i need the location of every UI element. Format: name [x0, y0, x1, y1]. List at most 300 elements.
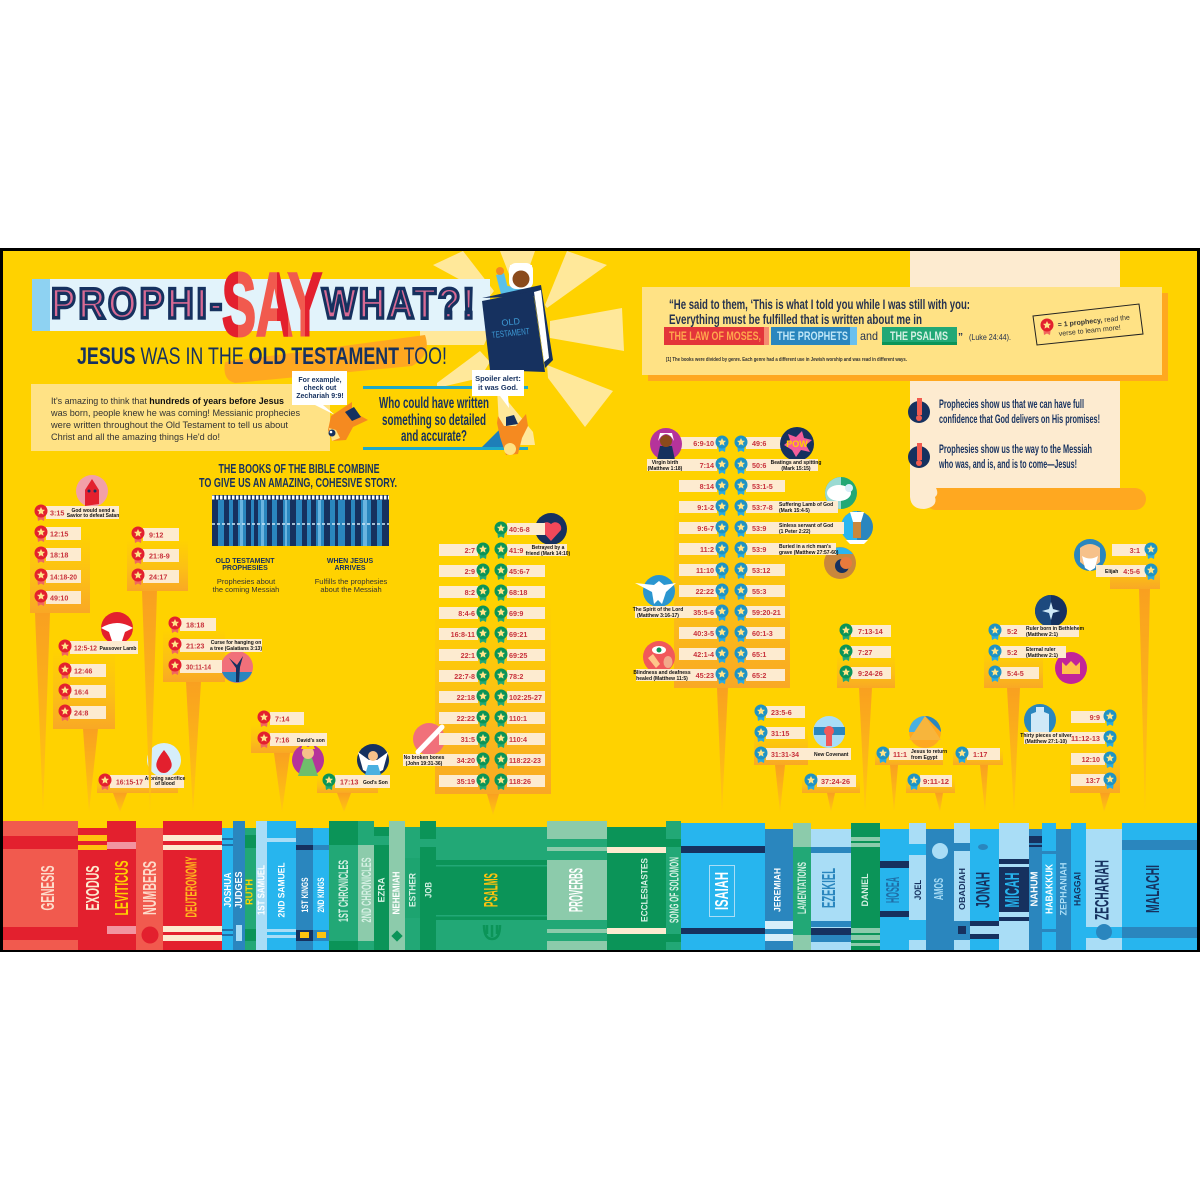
2 Samuel 7:16: 7:16: [275, 736, 289, 744]
icon: Old Testament book with figure: [482, 263, 553, 372]
Genesis 12:15: [34, 526, 81, 542]
book: 1st Chronicles: [329, 821, 358, 950]
Numbers 21:8-9: [132, 548, 179, 564]
caption: no broken bones: [403, 754, 446, 767]
caption: virgin birth: (Matthew 1:18): [648, 466, 683, 472]
caption: blindness and deafness: [633, 669, 691, 682]
Isaiah rows left: 9:1-2: [697, 503, 714, 512]
Psalm rows right: 118:22-23: [509, 756, 541, 765]
timeline: Zechariah prophecies: [1020, 704, 1120, 812]
Isaiah rows left: 8:14: [700, 482, 714, 491]
quote panel: and: [860, 329, 878, 343]
Psalm rows left: 35:19: [457, 777, 475, 786]
caption: rich man's grave: Buried in a rich man's: [779, 544, 831, 550]
book: Job: [420, 821, 436, 950]
Ezekiel 37:24-26: 37:24-26: [821, 777, 850, 786]
book: Joel: [909, 823, 926, 950]
book: Ecclesiastes: [607, 827, 666, 950]
Psalm rows right: 78:2: [509, 672, 523, 681]
icon: star of Bethlehem: [1035, 595, 1067, 627]
quote panel: Everything must be fulfilled that is written about me in: [669, 312, 922, 327]
Micah 5:2 ruler: [988, 624, 1085, 640]
Daniel 7:13-14: 7:13-14: [858, 627, 883, 636]
Isaiah rows left: 45:23: [696, 671, 714, 680]
title: Prophi-Say What?!: [32, 254, 490, 354]
book: Jonah: JONAH: [974, 872, 994, 908]
timeline: Malachi prophecies: [1074, 539, 1160, 812]
Psalm rows left: 16:8-11: [451, 630, 475, 639]
legend: one prophecy badge: verse to learn more!: [1058, 325, 1121, 338]
Psalm rows left: 22:22: [457, 714, 475, 723]
book: Esther: [405, 827, 420, 950]
Psalm rows right: 69:25: [509, 651, 527, 660]
icon: angel: [357, 744, 389, 776]
book: 1st Samuel: [256, 821, 268, 950]
Isaiah rows right: 53:9: [752, 545, 766, 554]
book: Joshua: [222, 828, 234, 950]
callout: who could have written: [363, 386, 528, 450]
Genesis 3:15: 3:15: [50, 508, 64, 518]
icon: Elijah: [1074, 539, 1106, 571]
caption: no broken bones: (John 19:31-36): [406, 761, 443, 767]
exclamation point note 2: [908, 443, 1092, 471]
icon: bare tree: [221, 651, 253, 683]
timeline: Daniel prophecies: [837, 624, 895, 812]
Isaiah rows right: 59:20-21: [752, 608, 781, 617]
book: Ezra: EZRA: [376, 877, 388, 902]
icon: thirty pieces of silver: [1024, 704, 1056, 736]
caption: beatings and spitting: [771, 459, 821, 472]
Isaiah rows left: 42:1-4: [693, 650, 714, 659]
heading: books of the Bible: TO GIVE US AN AMAZING, COHESIVE STORY.: [199, 476, 397, 490]
timeline: Isaiah prophecies: [633, 427, 873, 812]
book: 2nd Samuel: 2ND SAMUEL: [276, 862, 288, 918]
Obadiah 1:17: 1:17: [973, 750, 987, 759]
book: Psalms: PSALMS: [482, 873, 502, 907]
Deuteronomy 21:23: 21:23: [186, 642, 204, 650]
intro text panel: was born, people knew he was coming! Messianic prophecies: [50, 408, 300, 419]
Isaiah rows right: 53:12: [752, 566, 770, 575]
Psalm rows left: 34:20: [457, 756, 475, 765]
Jeremiah 31:15: 31:15: [771, 729, 789, 738]
book: Deuteronomy: DEUTERONOMY: [184, 856, 200, 918]
Malachi 4:5-6: Elijah: [1105, 569, 1118, 575]
heading: books of the Bible: THE BOOKS OF THE BIBLE COMBINE: [218, 462, 380, 476]
caption: virgin birth: Virgin birth: [652, 460, 678, 466]
bookshelf: all 39 books: [3, 821, 1197, 950]
Psalm rows right: 68:18: [509, 588, 527, 597]
Psalm rows right: 41:9: [509, 546, 523, 555]
Exodus 12:5-12: Passover Lamb: [100, 646, 136, 652]
caption: sinless servant: [777, 522, 844, 535]
caption: betrayed by a friend: [526, 545, 571, 557]
title: Prophi-Say What?!: SAY: [222, 254, 322, 354]
Isaiah rows right: 55:3: [752, 587, 766, 596]
book: Habakkuk: HABAKKUK: [1044, 863, 1056, 914]
heading: books of the Bible: [199, 462, 397, 490]
book: Micah: [999, 823, 1029, 950]
Isaiah rows right: 50:6: [752, 461, 766, 470]
Psalm rows right: 102:25-27: [509, 693, 542, 702]
Daniel 9:24-26: 9:24-26: [858, 669, 883, 678]
Zechariah 13:7: 13:7: [1086, 776, 1100, 785]
Deuteronomy 21:23: [168, 638, 262, 654]
caption: suffering lamb: (Mark 15:4-5): [779, 508, 810, 514]
icon: broken bone: [413, 723, 445, 755]
Genesis 14:18-20: 14:18-20: [50, 572, 77, 582]
label: Old Testament prophesies: PROPHESIES: [222, 565, 268, 572]
book: Haggai: HAGGAI: [1072, 872, 1084, 906]
Exodus 24:8: [58, 704, 106, 721]
book: Lamentations: LAMENTATIONS: [797, 862, 809, 914]
Psalm rows left: 2:9: [465, 567, 475, 576]
book: Zechariah: [1086, 829, 1122, 950]
book: Jeremiah: [765, 829, 793, 950]
book: Ezekiel: [811, 829, 851, 950]
Genesis 3:15: [34, 504, 119, 521]
Psalm rows left: 22:18: [457, 693, 475, 702]
page frame and yellow background: [2, 250, 1198, 950]
timeline: Micah prophecies: [984, 595, 1087, 812]
caption: suffering lamb: Suffering Lamb of God: [779, 502, 833, 508]
book: Haggai: [1071, 823, 1086, 950]
Isaiah rows left: 6:9-10: [693, 439, 714, 448]
Exodus 12:5-12: [58, 640, 138, 656]
Psalm rows right: 45:6-7: [509, 567, 530, 576]
book: 2nd Chronicles: [358, 821, 374, 950]
book: Micah: MICAH: [1002, 872, 1024, 908]
book: Judges: [233, 821, 245, 950]
Numbers 9:12: [132, 526, 179, 543]
exclamation point note 1: [908, 398, 1100, 426]
Micah 5:2 ruler: 5:2: [1007, 627, 1017, 636]
icon: passover lamb: [101, 612, 133, 644]
icon: sinless servant: [841, 511, 873, 544]
Jeremiah 31:31-34: 31:31-34: [771, 750, 799, 759]
icon: snake: [76, 475, 108, 507]
Exodus 12:46: [58, 662, 106, 679]
2 Samuel 7:14: 7:14: [275, 714, 289, 724]
icon: virgin birth: [650, 428, 682, 460]
Psalm rows left: [439, 542, 490, 790]
scroll panel background: [910, 251, 1146, 510]
book: Ezra: [374, 827, 389, 950]
quote panel: [1] The books were divided by genre. Each genre had a different use in Jewish worship and was read in different ways.: [666, 357, 907, 363]
exclamation point note 2: who was, and is, and is to come—Jesus!: [938, 459, 1077, 471]
Psalm rows right: 69:21: [509, 630, 527, 639]
Micah 5:4-5: [988, 666, 1039, 682]
Genesis 18:18: 18:18: [50, 550, 68, 560]
label: Old Testament prophesies: the coming Messiah: [213, 585, 279, 594]
icon: dove: [635, 575, 676, 607]
label: when Jesus arrives: WHEN JESUS: [327, 558, 373, 565]
Isaiah rows left: 7:14: [700, 461, 714, 470]
Numbers 24:17: [132, 568, 179, 585]
Malachi 3:1: 3:1: [1130, 546, 1140, 555]
Deuteronomy 18:18: 18:18: [186, 620, 204, 630]
Amos 9:11-12: 9:11-12: [923, 777, 949, 786]
book: Jonah: [970, 829, 999, 950]
tag: the law of moses: THE LAW OF MOSES,: [669, 329, 761, 343]
icon: donkey head left: [328, 402, 368, 441]
caption: virgin birth: [647, 459, 683, 472]
book: 1st Samuel: 1ST SAMUEL: [256, 865, 268, 915]
book: Exodus: [78, 828, 107, 950]
book: Daniel: [851, 823, 880, 950]
Isaiah rows right: 53:9: [752, 524, 766, 533]
icon: new covenant scroll: [813, 716, 845, 748]
Exodus 16:4: [58, 684, 106, 700]
subtitle: JESUS WAS IN THE OLD TESTAMENT TOO!: [77, 343, 447, 370]
sunburst rays behind book: [420, 251, 624, 445]
speech bubble: spoiler alert: it was God.: [478, 383, 518, 392]
Daniel 7:27: 7:27: [858, 648, 872, 657]
book: Psalms: [436, 827, 548, 950]
quote panel: “He said to them, ‘This is what I told you while I was still with you:: [669, 297, 970, 312]
icon: heart: [535, 513, 567, 545]
title: Prophi-Say What?!: WHAT?!: [322, 281, 475, 328]
callout: who could have written: Who could have written: [379, 395, 489, 412]
Zechariah 11:12-13: (Matthew 27:1-10): [1025, 739, 1067, 745]
Psalm rows left: 8:2: [465, 588, 475, 597]
Hosea 11:1: from Egypt: [911, 755, 938, 761]
Isaiah rows right: 65:2: [752, 671, 766, 680]
book: Zephaniah: ZEPHANIAH: [1058, 862, 1070, 916]
book: Deuteronomy: [163, 821, 222, 950]
book: Genesis: [3, 821, 78, 950]
icon: donkey head right: [482, 414, 528, 455]
quote panel: (Luke 24:44).: [969, 332, 1011, 342]
book: Numbers: NUMBERS: [140, 861, 160, 915]
exclamation point note 2: Prophesies show us the way to the Messiah: [939, 444, 1092, 456]
book: 2nd Kings: [313, 828, 329, 950]
label: Old Testament prophesies: OLD TESTAMENT: [216, 558, 275, 565]
Leviticus 16:15-17: 16:15-17: [116, 778, 143, 786]
Deuteronomy 30:11-14: 30:11-14: [186, 662, 211, 672]
caption: suffering lamb: [777, 501, 838, 514]
tag: the law of moses: [664, 327, 769, 345]
Micah 5:4-5: 5:4-5: [1007, 669, 1024, 678]
book: Nahum: NAHUM: [1030, 872, 1040, 906]
speech bubble: for example: [292, 371, 347, 415]
Genesis 3:15: God would send a: [71, 508, 115, 514]
Psalm rows left: 22:1: [461, 651, 475, 660]
Micah 5:2 eternal: (Matthew 2:1): [1026, 653, 1058, 659]
icon: pow: POW: [786, 439, 808, 449]
Psalm rows right: 40:6-8: [509, 525, 530, 534]
book: Proverbs: PROVERBS: [566, 868, 588, 912]
Isaiah rows left: 35:5-6: [693, 608, 714, 617]
Genesis 18:18: [34, 546, 81, 563]
Isaiah rows left: 9:6-7: [697, 524, 714, 533]
Leviticus 16:15-17: of blood: [155, 781, 175, 787]
book: Ezekiel: EZEKIEL: [819, 868, 839, 908]
Hosea 11:1: [876, 746, 947, 763]
exclamation point note 1: confidence that God delivers on His promises!: [939, 414, 1100, 426]
intro text panel: were written throughout the Old Testament to tell us about: [50, 420, 288, 431]
1 Chronicles 17:13: [322, 774, 390, 790]
1 Chronicles 17:13: 17:13: [340, 778, 358, 786]
label: when Jesus arrives: Fulfills the prophesies: [315, 577, 388, 586]
icon: pow: [780, 427, 814, 461]
speech bubble: for example: Zechariah 9:9!: [296, 393, 344, 400]
book: Joel: JOEL: [913, 880, 923, 900]
timeline: 1 Chronicles prophecy: [317, 744, 390, 812]
Zechariah 11:12-13: Thirty pieces of silver: [1020, 733, 1072, 739]
Leviticus 16:15-17: Atoning sacrifice: [145, 776, 185, 782]
tag: the psalms: [882, 327, 957, 345]
speech bubble: spoiler alert: Spoiler alert:: [475, 374, 521, 383]
book: Hosea: HOSEA: [883, 877, 903, 903]
caption: beatings and spitting: Beatings and spitting: [771, 460, 821, 466]
book: 2nd Samuel: [267, 821, 296, 950]
book: Leviticus: [107, 821, 136, 950]
Exodus 12:46: 12:46: [74, 666, 92, 676]
caption: sinless servant: (1 Peter 2:22): [779, 529, 811, 535]
book: Ruth: [244, 828, 256, 950]
speech bubble: for example: check out: [304, 385, 337, 392]
label: when Jesus arrives: about the Messiah: [320, 585, 382, 594]
Malachi 4:5-6: 4:5-6: [1123, 567, 1140, 576]
caption: sinless servant: Sinless servant of God: [779, 523, 833, 529]
label: Old Testament prophesies: Prophesies about: [217, 577, 276, 586]
timeline: Deuteronomy prophecies: [163, 616, 262, 812]
Zechariah 11:12-13: [1020, 730, 1116, 747]
book: Esther: ESTHER: [408, 873, 418, 907]
Exodus 16:4: 16:4: [74, 688, 88, 696]
book: Daniel: DANIEL: [860, 873, 870, 906]
Daniel 7:27: [840, 644, 891, 661]
Isaiah rows left: [679, 436, 728, 684]
label: Old Testament prophesies: [213, 558, 279, 594]
timeline: Obadiah prophecy: [953, 746, 1003, 812]
book: Job: JOB: [424, 882, 434, 898]
book: Nahum: [1029, 829, 1042, 950]
Isaiah rows left: 11:10: [696, 566, 714, 575]
book: Obadiah: OBADIAH: [957, 868, 967, 910]
Zechariah 11:12-13: 11:12-13: [1071, 734, 1100, 743]
Isaiah rows right: [734, 436, 785, 684]
book: Judges: JUDGES: [233, 872, 245, 908]
book: Lamentations: [793, 823, 811, 950]
book: 1st Kings: 1ST KINGS: [300, 878, 310, 912]
Isaiah rows right: 53:7-8: [752, 503, 773, 512]
Deuteronomy 18:18: [168, 616, 216, 633]
Genesis 49:10: [34, 590, 81, 606]
Psalm rows left: 2:7: [465, 546, 475, 555]
book: Numbers: [136, 828, 163, 950]
Isaiah rows left: 40:3-5: [693, 629, 714, 638]
timeline: Jeremiah prophecies: [754, 704, 851, 812]
caption: spirit of the Lord: The Spirit of the Lord: [633, 607, 683, 613]
Psalm rows right: 69:9: [509, 609, 523, 618]
quote panel: ”: [958, 332, 963, 343]
1 Chronicles 17:13: God's Son: [363, 780, 388, 786]
Deuteronomy 21:23: a tree (Galatians 3:13): [210, 646, 262, 652]
Genesis 49:10: 49:10: [50, 594, 68, 602]
book: Joshua: JOSHUA: [222, 872, 234, 908]
Psalm rows right: 110:1: [509, 714, 527, 723]
Exodus 12:5-12: 12:5-12: [74, 644, 97, 652]
caption: rich man's grave: [777, 543, 839, 556]
Zechariah 9:9: 9:9: [1090, 713, 1100, 722]
Hosea 11:1: Jesus to return: [911, 749, 947, 755]
tag: the prophets: [771, 327, 857, 345]
Psalm rows left: 31:5: [461, 735, 475, 744]
intro text panel: It's amazing to think that hundreds of years before Jesus: [51, 396, 284, 407]
book: Proverbs: [547, 821, 607, 950]
Hosea 11:1: 11:1: [893, 750, 907, 759]
icon: suffering lamb: [825, 477, 857, 509]
caption: no broken bones: No broken bones: [404, 755, 445, 761]
Psalm rows left: 22:7-8: [454, 672, 475, 681]
caption: spirit of the Lord: [633, 606, 683, 619]
Numbers 9:12: 9:12: [149, 530, 163, 540]
icon: Old Testament book with figure: TESTAMENT: [491, 326, 530, 340]
2 Samuel 7:16: [258, 732, 327, 748]
callout: who could have written: and accurate?: [401, 428, 467, 445]
book: Genesis: GENESIS: [38, 866, 58, 910]
Genesis 3:15: Savior to defeat Satan: [67, 513, 119, 519]
book: 2nd Kings: 2ND KINGS: [316, 878, 326, 912]
Jeremiah 23:5-6: 23:5-6: [771, 708, 792, 717]
book: Song of Solomon: SONG OF SOLOMON: [666, 857, 682, 923]
caption: blindness and deafness: healed (Matthew 11:5): [636, 676, 688, 682]
timeline: Genesis prophecies: [30, 475, 119, 812]
book: Jeremiah: JEREMIAH: [772, 868, 784, 912]
Genesis 14:18-20: [34, 568, 81, 585]
caption: betrayed by a friend: Betrayed by a: [532, 545, 565, 551]
2 Samuel 7:16: David's son: [297, 738, 325, 744]
Exodus 24:8: 24:8: [74, 708, 88, 718]
Isaiah rows right: 65:1: [752, 650, 766, 659]
book: Hosea: [880, 829, 909, 950]
Malachi 3:1: [1112, 542, 1158, 559]
quote panel: [642, 287, 1168, 381]
Isaiah rows right: 60:1-3: [752, 629, 773, 638]
callout: who could have written: something so detailed: [382, 412, 486, 429]
book: Ecclesiastes: ECCLESIASTES: [640, 858, 650, 922]
illustration: row of Bible books: [212, 495, 389, 546]
Psalm rows right: 110:4: [509, 735, 527, 744]
caption: rich man's grave: grave (Matthew 27:57-60): [779, 550, 839, 556]
title: Prophi-Say What?!: PROPHI-: [51, 281, 222, 328]
book: Isaiah: [681, 823, 765, 950]
timeline: Numbers prophecies: [127, 526, 188, 812]
Micah 5:2 eternal: Eternal ruler: [1026, 647, 1056, 653]
book: Isaiah: ISAIAH: [712, 872, 732, 910]
book: Nehemiah: NEHEMIAH: [392, 872, 402, 914]
book: Song of Solomon: [666, 821, 682, 950]
label: when Jesus arrives: [315, 558, 388, 594]
Zechariah 12:10: 12:10: [1082, 755, 1100, 764]
legend: one prophecy badge: = 1 prophecy, read the: [1057, 314, 1130, 329]
Isaiah rows right: 53:1-5: [752, 482, 773, 491]
timeline: Psalms prophecies: [403, 513, 571, 815]
Numbers 24:17: 24:17: [149, 572, 167, 582]
book: Exodus: EXODUS: [83, 866, 103, 910]
caption: beatings and spitting: (Mark 15:15): [781, 466, 811, 472]
Isaiah rows right: 49:6: [752, 439, 766, 448]
Genesis 12:15: 12:15: [50, 530, 68, 538]
Deuteronomy 30:11-14: [168, 658, 222, 675]
book: Habakkuk: [1042, 823, 1056, 950]
book: Malachi: MALACHI: [1143, 865, 1163, 913]
book: 1st Kings: [296, 828, 313, 950]
caption: blindness and deafness: Blindness and deafness: [633, 670, 691, 676]
Psalm rows right: 118:26: [509, 777, 531, 786]
icon: David's son: [292, 744, 324, 776]
